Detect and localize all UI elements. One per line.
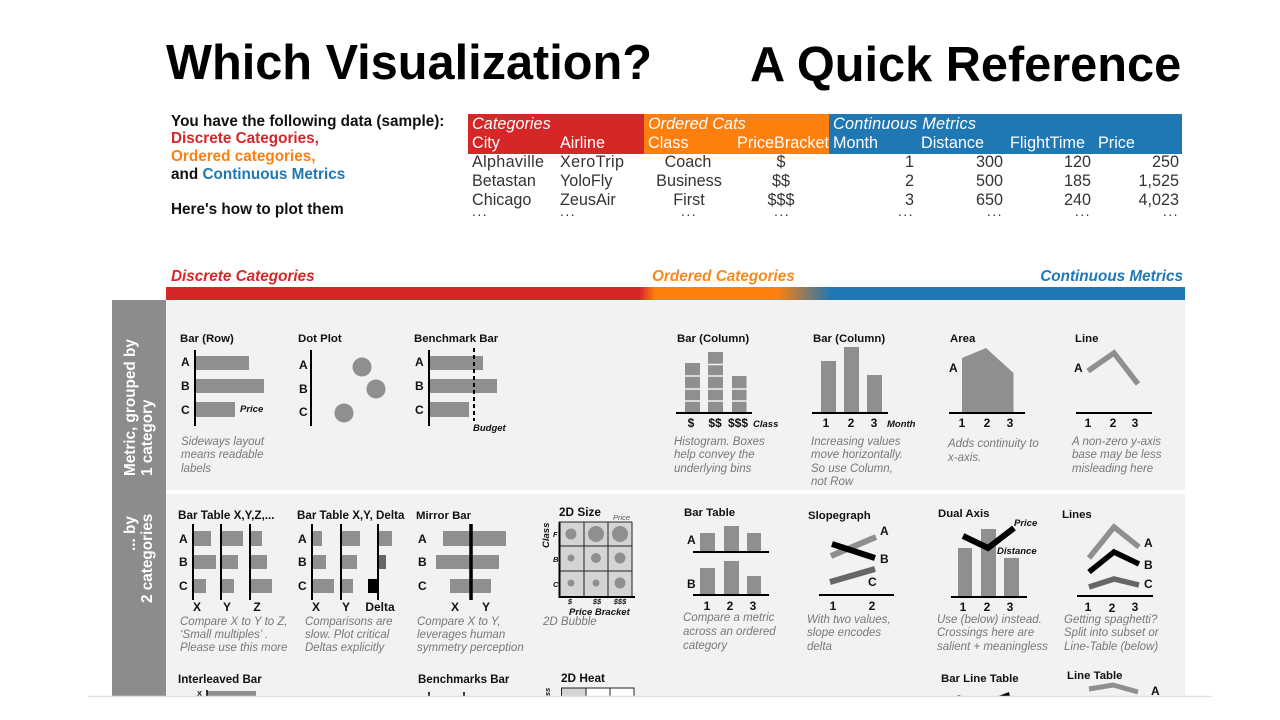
table header: categories [468,114,644,154]
chart: slopegraph: 2 [869,599,876,613]
chart: 2D size bubble matrix: Price Bracket [569,607,631,618]
chart: column by month: 3 [871,416,878,430]
chart: column by month: not Row [811,476,854,488]
table header: continuous metrics: Price [1098,134,1135,152]
chart: line [1071,333,1162,475]
chart: interleaved bar, clipped: X [197,689,202,698]
gradient colour bar [166,287,1185,300]
side label: by 2 categories [122,514,156,603]
table rows: 120 [1064,153,1091,171]
chart: 2D size bubble matrix: 2D Bubble [542,616,597,628]
chart: bar table xyz: B [179,555,188,569]
chart: dot plot [298,333,386,426]
table rows: 185 [1064,172,1091,190]
chart: mirror bar: Compare X to Y, [417,616,501,628]
chart: bar table xyz: Z [253,600,261,614]
chart: bar table ordered: Compare a metric [683,612,775,624]
chart: bar table xyz: C [179,579,188,593]
chart: 2D size bubble matrix [541,505,635,628]
panel: row 1 background [166,300,1185,490]
chart: bar table xyz: Bar Table X,Y,Z,... [178,509,275,522]
table rows [472,153,1179,219]
chart: 2D size bubble matrix: B [553,555,559,564]
chart: bar table delta: B [298,555,307,569]
chart: dual axis: 3 [1007,600,1014,614]
chart: dual axis: Dual Axis [938,508,990,520]
table rows: ... [987,203,1003,219]
table rows: ... [774,203,790,219]
chart: dual axis: Crossings here are [937,627,1034,639]
side label: metric grouped by 1 category [122,339,156,476]
chart: bar table ordered: across an ordered [683,626,776,638]
table header: categories: Airline [560,134,605,152]
table rows: Chicago [472,191,531,209]
chart: bar table delta: X [312,600,320,614]
chart: 2D size bubble matrix: C [553,580,559,589]
chart: 2D size bubble matrix: $ [567,597,573,606]
chart: mirror bar: leverages human [417,629,505,641]
chart: bar table delta: Delta [365,600,395,614]
side label: metric grouped by 1 category: 1 category [139,399,156,476]
chart: dual axis: salient + meaningless [937,641,1048,653]
chart: slopegraph: slope encodes [807,627,881,639]
table rows: 4,023 [1138,191,1179,209]
chart: lines: Split into subset or [1064,627,1160,639]
chart: 2D heat, clipped: 2D Heat [561,671,605,685]
table header: ordered cats: Ordered Cats [648,115,746,133]
chart: bar row: Bar (Row) [180,333,234,345]
table rows: ... [898,203,914,219]
chart: histogram column: Bar (Column) [677,333,749,345]
table header: ordered cats: PriceBracket [737,134,830,152]
chart: column by month: move horizontally. [811,449,903,461]
chart: 2D size bubble matrix: 2D Size [559,505,601,519]
chart: bar row: Price [240,404,264,415]
chart: dual axis [937,508,1048,653]
chart: column by month: Bar (Column) [813,333,885,345]
chart: 2D size bubble matrix: Price [613,513,630,522]
chart: bar table xyz: Please use this more [180,642,287,654]
chart: line: 1 [1085,416,1092,430]
chart: histogram column: $$ [708,416,722,430]
chart: benchmark bar: Budget [473,423,507,434]
table rows: $$ [772,172,790,190]
chart: bar table ordered: 2 [727,599,734,613]
chart: area: 3 [1007,416,1014,430]
chart: 2D heat, clipped: ss [543,688,552,696]
chart: bar table delta: slow. Plot critical [305,629,390,641]
chart: bar table ordered: A [687,533,696,547]
chart: area: A [949,361,958,375]
chart: dual axis: 1 [960,600,967,614]
table header: categories: Categories [472,115,551,133]
table rows: ... [681,203,697,219]
chart: area [947,333,1039,464]
table rows: Coach [665,153,711,171]
chart: line: 3 [1132,416,1139,430]
chart: bar table xyz: X [193,600,201,614]
chart: area: 1 [959,416,966,430]
chart: histogram column: underlying bins [674,463,752,475]
chart: bar row: labels [181,463,211,475]
chart: dual axis: Use (below) instead. [937,614,1042,626]
table header: continuous metrics [829,114,1182,154]
chart: area: Area [950,333,976,345]
chart: interleaved bar, clipped: Interleaved Bar [178,673,262,686]
chart: bar table ordered: category [683,640,728,652]
chart: line: Line [1075,333,1098,345]
table rows: XeroTrip [560,153,624,171]
chart: column by month: Increasing values [811,436,901,448]
chart: column by month: So use Column, [811,463,893,475]
chart: benchmarks bar, clipped: Benchmarks Bar [418,674,510,686]
chart: histogram column: help convey the [674,449,755,461]
table header: categories: City [472,134,501,152]
chart: slopegraph: With two values, [807,614,891,626]
chart: 2D size bubble matrix: $$$ [613,597,627,606]
side label: metric grouped by 1 category: Metric, grouped by [122,339,139,476]
chart: line: A [1074,361,1083,375]
chart: mirror bar: A [418,532,427,546]
chart: mirror bar [416,510,524,654]
chart: column by month: 2 [848,416,855,430]
title: Which Visualization? [166,36,652,90]
intro text block: Discrete Categories, [171,130,319,147]
heading: discrete categories: Discrete Categories [171,268,315,285]
chart: 2D size bubble matrix: $$ [592,597,602,606]
chart: dot plot: A [299,358,308,372]
chart: lines: 3 [1132,600,1139,614]
table rows: 2 [905,172,914,190]
side label: by 2 categories: ... by [122,516,139,551]
table rows: ... [472,203,488,219]
table rows: 240 [1064,191,1091,209]
chart: line: misleading here [1072,463,1153,475]
table rows: ... [1163,203,1179,219]
table rows: 1 [905,153,914,171]
chart: area: 2 [984,416,991,430]
table rows: 250 [1152,153,1179,171]
table header: continuous metrics: Continuous Metrics [833,115,976,133]
chart: bar row [180,333,265,475]
chart: bar table xyz: ‘Small multiples’ . [180,629,268,641]
chart: slopegraph: delta [807,641,832,653]
chart: slopegraph: B [880,552,889,566]
chart: column by month: Month [887,419,916,430]
chart: line: 2 [1110,416,1117,430]
intro text block: and Continuous Metrics [171,166,345,183]
table rows: $$$ [767,191,795,209]
chart: lines [1062,509,1160,653]
table rows: 1,525 [1138,172,1179,190]
table rows: 300 [976,153,1003,171]
chart: lines: Line-Table (below) [1064,641,1158,653]
chart: area: x-axis. [947,452,981,464]
chart: slopegraph: Slopegraph [808,510,871,522]
table rows: YoloFly [560,172,613,190]
subtitle: A Quick Reference [750,38,1181,92]
chart: slopegraph: C [868,575,877,589]
table header: ordered cats [644,114,830,154]
chart: lines: 1 [1085,600,1092,614]
chart: histogram column: $ [688,416,695,430]
chart: slopegraph: 1 [830,599,837,613]
chart: column by month [811,333,916,488]
chart: mirror bar: X [451,600,459,614]
chart: bar row: A [181,355,190,369]
chart: bar row: means readable [181,449,263,461]
chart: dual axis: Distance [997,546,1037,557]
sample data table [468,114,1182,219]
chart: benchmark bar: C [415,403,424,417]
table rows: ... [560,203,576,219]
chart: line table, clipped: A [1151,684,1160,698]
bottom cover [0,697,1280,720]
chart: mirror bar: B [418,555,427,569]
table rows: Alphaville [472,153,544,171]
table rows: First [673,191,705,209]
chart: 2D size bubble matrix: Class [541,523,552,548]
table rows: Betastan [472,172,536,190]
chart: lines: A [1144,536,1153,550]
chart: mirror bar: Y [482,600,490,614]
chart: line: base may be less [1072,449,1162,461]
chart: lines: C [1144,577,1153,591]
chart: dual axis: 2 [984,600,991,614]
table rows: 650 [976,191,1003,209]
chart: bar table delta: Comparisons are [305,616,393,628]
chart: bar table xyz: A [179,532,188,546]
chart: lines: Getting spaghetti? [1064,614,1158,626]
chart: bar table delta: A [298,532,307,546]
chart: column by month: 1 [823,416,830,430]
chart: histogram column: Histogram. Boxes [674,436,765,448]
chart: bar line table, clipped [941,673,1019,697]
intro text block: You have the following data (sample): [171,113,444,130]
chart: lines: Lines [1062,509,1092,521]
intro text block: Ordered categories, [171,148,316,165]
chart: slopegraph: A [880,524,889,538]
chart: histogram column: Class [753,419,778,430]
heading: continuous metrics: Continuous Metrics [1040,268,1183,285]
chart: bar table xyz [178,509,288,654]
table header: ordered cats: Class [648,134,688,152]
chart: bar table ordered: B [687,577,696,591]
table rows: ... [1075,203,1091,219]
chart: bar row: Sideways layout [181,436,265,448]
chart: dot plot: Dot Plot [298,333,342,345]
chart: 2D size bubble matrix: F [553,530,558,539]
table rows: ZeusAir [560,191,616,209]
chart: histogram column [674,333,778,475]
chart: area: Adds continuity to [947,438,1039,450]
chart: bar table delta: Bar Table X,Y, Delta [297,509,405,522]
chart: mirror bar: symmetry perception [417,642,524,654]
chart: dual axis: Price [1014,518,1038,529]
chart: bar row: B [181,379,190,393]
chart: histogram column: $$$ [728,416,748,430]
chart: lines: 2 [1109,601,1116,615]
table header: continuous metrics: FlightTime [1010,134,1085,152]
table rows: 500 [976,172,1003,190]
table rows: Business [656,172,722,190]
chart: bar table xyz: Compare X to Y to Z, [180,616,288,628]
table header: continuous metrics: Month [833,134,878,152]
chart: mirror bar: Mirror Bar [416,510,472,522]
chart: bar row: C [181,403,190,417]
chart: line: A non-zero y-axis [1071,436,1161,448]
chart: bar table delta [297,509,405,654]
chart: bar table delta: Y [342,600,350,614]
table rows: $ [776,153,786,171]
chart: bar table ordered [683,507,776,652]
chart: benchmarks bar, clipped [418,674,510,697]
table header: continuous metrics: Distance [921,134,984,152]
chart: interleaved bar, clipped [178,673,262,698]
chart: bar table delta: C [298,579,307,593]
side band [112,300,166,697]
chart: benchmark bar: Benchmark Bar [414,333,499,345]
intro text block: Here's how to plot them [171,201,344,218]
chart: bar table delta: Deltas explicitly [305,642,385,654]
chart: bar table xyz: Y [223,600,231,614]
table rows: 3 [905,191,914,209]
chart: benchmark bar: A [415,355,424,369]
chart: bar line table, clipped: Bar Line Table [941,673,1019,685]
chart: dot plot: B [299,382,308,396]
chart: dot plot: C [299,405,308,419]
chart: benchmark bar: B [415,379,424,393]
chart: bar table ordered: 3 [750,599,757,613]
side label: by 2 categories: 2 categories [139,514,156,603]
chart: slopegraph [807,510,894,653]
chart: lines: B [1144,558,1153,572]
chart: benchmark bar [414,333,507,434]
chart: line table, clipped: Line Table [1067,670,1122,682]
chart: bar table ordered: 1 [704,599,711,613]
chart: bar table ordered: Bar Table [684,507,735,519]
chart: line table, clipped [1067,670,1160,698]
chart: mirror bar: C [418,579,427,593]
heading: ordered categories: Ordered Categories [652,268,795,285]
panel: row 2 background [166,494,1185,697]
intro text block [171,113,444,218]
chart: 2D heat, clipped [543,671,634,697]
